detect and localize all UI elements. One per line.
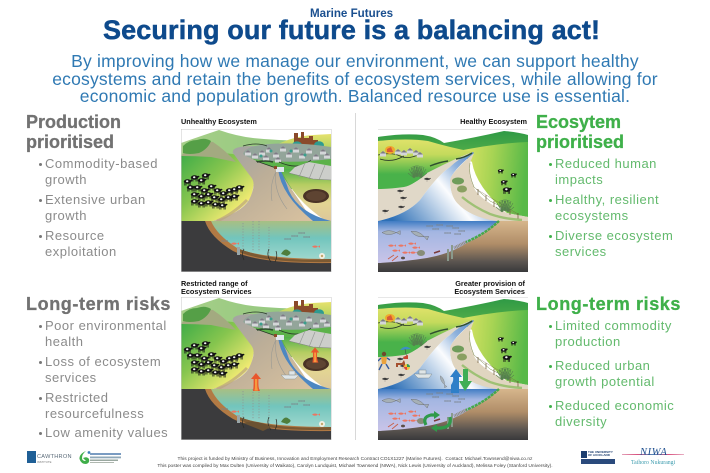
funding and credits bbox=[157, 456, 553, 469]
icon: green recycling arrows bbox=[425, 411, 450, 432]
icon: red arrow from land bbox=[251, 373, 261, 391]
icon: boat bbox=[414, 370, 432, 378]
left list: production benefits: Resource bbox=[45, 228, 105, 243]
logo: NIWA Taihoro Nukurangi bbox=[622, 447, 684, 466]
right list: ecosystem risks bbox=[549, 318, 674, 429]
funding and credits: This project is funded by Ministry of Business, Innovation and Employment Research Contract CO1X1227 (Marine Futures). Contact: Michael.Townsend@niwa.co.nz bbox=[178, 457, 532, 462]
panel title: Healthy Ecosystem: Healthy Ecosystem bbox=[460, 117, 527, 126]
logo: University of Auckland bbox=[581, 450, 615, 464]
panel: greater ecosystem services scene bbox=[378, 297, 528, 440]
left list: production risks: resourcefulness bbox=[45, 406, 144, 421]
left list: production benefits bbox=[39, 156, 158, 259]
left list: production benefits: growth bbox=[45, 208, 87, 223]
left heading: Production prioritised: prioritised bbox=[26, 132, 114, 152]
left heading: Production prioritised bbox=[26, 112, 121, 152]
logo: University of Auckland: THE UNIVERSITY bbox=[588, 450, 613, 454]
panel title: Restricted range of Ecosystem Services: Ecosystem Services bbox=[181, 287, 252, 296]
right heading: Long-term risks: Long-term risks bbox=[536, 294, 681, 314]
right list: ecosystem benefits: Healthy, resilient bbox=[555, 192, 659, 207]
panel title: Unhealthy Ecosystem: Unhealthy Ecosystem bbox=[181, 117, 257, 126]
funding and credits: This poster was compiled by Max Dulten (University of Waikato), Carolyn Lundquist, Michael Townsend (NIWA), Nick Lewis (University of Auckland), Melissa Foley (Stanford University). bbox=[157, 464, 553, 469]
left list: production risks: health bbox=[45, 334, 83, 349]
logo: University of Auckland: OF AUCKLAND bbox=[588, 453, 610, 457]
title: Securing our future is a balancing act! bbox=[103, 15, 600, 45]
left list: production benefits: Commodity-based bbox=[45, 156, 158, 171]
right list: ecosystem benefits: Reduced human bbox=[555, 156, 657, 171]
left heading: Long-term risks: Long-term risks bbox=[26, 294, 171, 314]
right list: ecosystem benefits: Diverse ecosystem bbox=[555, 228, 673, 243]
left list: production benefits: Extensive urban bbox=[45, 192, 146, 207]
right list: ecosystem risks: production bbox=[555, 334, 621, 349]
right list: ecosystem risks: Reduced economic bbox=[555, 398, 674, 413]
icon: beach ball bbox=[404, 364, 410, 370]
header: Marine Futures: Marine Futures bbox=[310, 7, 393, 20]
right heading: Ecosystem prioritised: Ecosytem bbox=[536, 112, 621, 132]
right list: ecosystem risks: Reduced urban bbox=[555, 358, 650, 373]
right list: ecosystem benefits: impacts bbox=[555, 172, 603, 187]
right list: ecosystem benefits: services bbox=[555, 244, 607, 259]
panel: restricted ecosystem services scene bbox=[181, 297, 332, 440]
panel title: Greater provision of Ecosystem Services: Greater provision of bbox=[455, 279, 525, 288]
logo: Cawthron Institute: INSTITUTE bbox=[37, 460, 51, 464]
icon: umbrella and chair bbox=[400, 347, 411, 359]
panel: unhealthy ecosystem scene bbox=[181, 129, 332, 272]
icon: jumping fish bbox=[439, 375, 447, 388]
left list: production risks: Loss of ecosystem bbox=[45, 354, 161, 369]
icon: green arrow down bbox=[459, 369, 472, 391]
panel title: Restricted range of Ecosystem Services bbox=[181, 279, 252, 296]
left list: production risks: Restricted bbox=[45, 390, 109, 405]
panel title: Greater provision of Ecosystem Services: Ecosystem Services bbox=[454, 287, 525, 296]
logo: NIWA Taihoro Nukurangi: NIWA bbox=[640, 447, 667, 458]
icon: dog bbox=[396, 360, 405, 367]
intro paragraph: ecosystems and retain the benefits of ecosystem services, while allowing for bbox=[52, 69, 658, 89]
intro paragraph bbox=[52, 51, 658, 106]
icon: person running bbox=[378, 352, 390, 370]
left list: production benefits: exploitation bbox=[45, 244, 117, 259]
panel title: Greater provision of Ecosystem Services bbox=[454, 279, 525, 296]
left list: production risks bbox=[39, 318, 168, 440]
icon: blue arrow up bbox=[450, 369, 462, 393]
left heading: Production prioritised: Production bbox=[26, 112, 121, 132]
left list: production risks: Poor environmental bbox=[45, 318, 167, 333]
right list: ecosystem risks: Limited commodity bbox=[555, 318, 672, 333]
divider line bbox=[355, 113, 356, 440]
intro paragraph: economic and population growth. Balanced resource use is essential. bbox=[80, 86, 630, 106]
right list: ecosystem benefits bbox=[549, 156, 673, 259]
logo: NIWA Taihoro Nukurangi: Taihoro Nukurangi bbox=[631, 460, 675, 466]
right heading: Ecosystem prioritised bbox=[536, 112, 624, 152]
right list: ecosystem benefits: ecosystems bbox=[555, 208, 629, 223]
right heading: Ecosystem prioritised: prioritised bbox=[536, 132, 624, 152]
icon: boat bbox=[281, 371, 299, 379]
sediment plume bbox=[243, 422, 271, 431]
icon: red arrow from dairy bbox=[311, 347, 319, 363]
logo: Cawthron Institute: CAWTHRON bbox=[37, 454, 72, 460]
left list: production risks: services bbox=[45, 370, 97, 385]
intro paragraph: By improving how we manage our environment, we can support healthy bbox=[71, 51, 639, 71]
logo: Greenhouse research group bbox=[79, 451, 121, 464]
right list: ecosystem risks: diversity bbox=[555, 414, 607, 429]
right list: ecosystem risks: growth potential bbox=[555, 374, 655, 389]
panel: healthy ecosystem scene bbox=[378, 129, 528, 272]
left list: production benefits: growth bbox=[45, 172, 87, 187]
panel title: Restricted range of Ecosystem Services: Restricted range of bbox=[181, 279, 248, 288]
logo: Cawthron Institute bbox=[27, 451, 72, 464]
left list: production risks: Low amenity values bbox=[45, 425, 168, 440]
